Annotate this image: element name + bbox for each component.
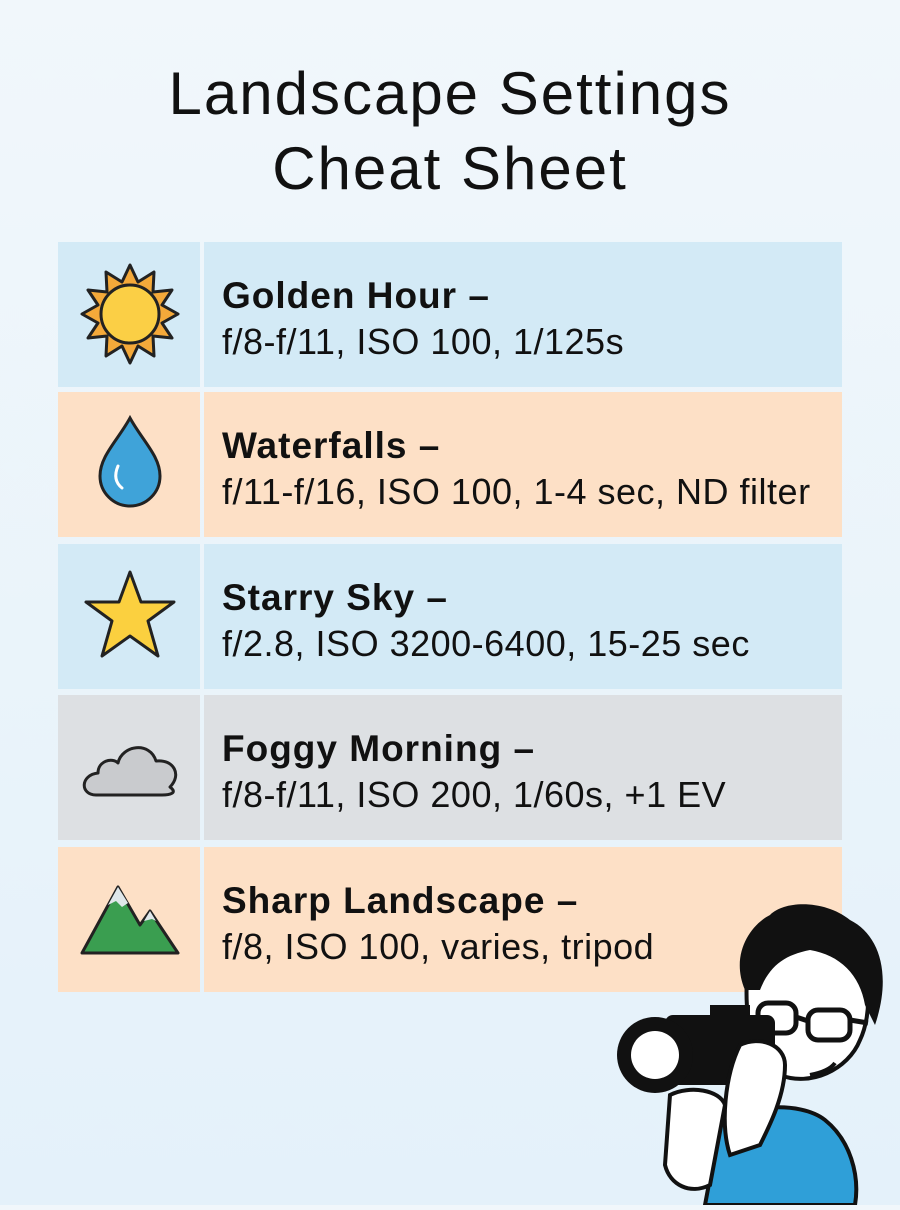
text: golden hour: f/8-f/11, ISO 100, 1/125s bbox=[222, 321, 624, 362]
text: foggy morning: f/8-f/11, ISO 200, 1/60s, +1 EV bbox=[222, 774, 726, 815]
text: waterfalls bbox=[204, 392, 842, 537]
text: sharp landscape: Sharp Landscape – bbox=[222, 880, 578, 921]
body shirt bbox=[705, 1107, 856, 1205]
text: golden hour: Golden Hour – bbox=[222, 275, 490, 316]
text: foggy morning bbox=[204, 695, 842, 840]
title: Cheat Sheet bbox=[272, 135, 628, 202]
text: starry sky: Starry Sky – bbox=[222, 577, 448, 618]
glasses bbox=[758, 1003, 868, 1040]
title: Landscape Settings bbox=[168, 60, 732, 127]
icon: star bbox=[58, 544, 200, 689]
text: starry sky: f/2.8, ISO 3200-6400, 15-25 sec bbox=[222, 623, 750, 664]
text: waterfalls: f/11-f/16, ISO 100, 1-4 sec, ND filter bbox=[222, 471, 811, 512]
text: sharp landscape bbox=[204, 847, 842, 992]
title bbox=[168, 60, 732, 202]
head bbox=[747, 936, 868, 1079]
text: waterfalls: Waterfalls – bbox=[222, 425, 440, 466]
icon: sun bbox=[58, 242, 200, 387]
text: golden hour bbox=[204, 242, 842, 387]
icon: cloud bbox=[58, 695, 200, 840]
row: sharp landscape bbox=[58, 847, 842, 992]
hands bbox=[725, 1041, 785, 1155]
row: golden hour bbox=[58, 242, 842, 387]
text: foggy morning: Foggy Morning – bbox=[222, 728, 535, 769]
row: foggy morning bbox=[58, 695, 842, 840]
camera bbox=[617, 1005, 775, 1093]
row: starry sky bbox=[58, 544, 842, 689]
text: sharp landscape: f/8, ISO 100, varies, tripod bbox=[222, 926, 654, 967]
icon: mountains bbox=[58, 847, 200, 992]
icon: water drop bbox=[58, 392, 200, 537]
hair bbox=[740, 904, 883, 1025]
text: starry sky bbox=[204, 544, 842, 689]
illustration: photographer bbox=[617, 904, 883, 1205]
row: waterfalls bbox=[58, 392, 842, 537]
